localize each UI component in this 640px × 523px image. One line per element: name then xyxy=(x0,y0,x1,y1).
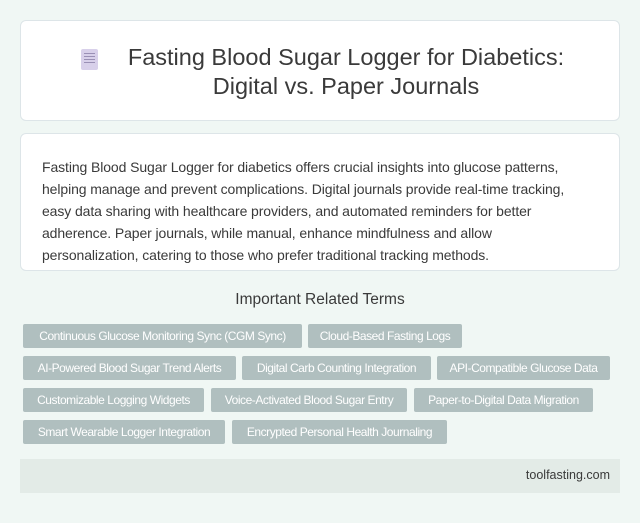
tags: Smart Wearable Logger Integration xyxy=(38,425,210,439)
description text: adherence. Paper journals, while manual, enhance mindfulness and allow xyxy=(42,225,492,241)
tags: AI-Powered Blood Sugar Trend Alerts xyxy=(38,361,221,375)
title xyxy=(128,44,564,99)
description card xyxy=(20,133,620,271)
tags: API-Compatible Glucose Data xyxy=(450,361,597,375)
section heading: Important Related Terms xyxy=(235,291,405,308)
footer xyxy=(20,459,620,493)
description text: personalization, catering to those who prefer traditional tracking methods. xyxy=(42,247,489,263)
tags: Paper-to-Digital Data Migration xyxy=(428,393,579,407)
title: Digital vs. Paper Journals xyxy=(213,73,479,99)
tags: Customizable Logging Widgets xyxy=(37,393,190,407)
tags: Digital Carb Counting Integration xyxy=(257,361,416,375)
tags: Encrypted Personal Health Journaling xyxy=(247,425,432,439)
description text: helping manage and prevent complications. Digital journals provide real-time tracking, xyxy=(42,181,564,197)
tags: Cloud-Based Fasting Logs xyxy=(320,329,450,343)
header card xyxy=(20,20,620,121)
tags: Voice-Activated Blood Sugar Entry xyxy=(225,393,393,407)
description text: Fasting Blood Sugar Logger for diabetics offers crucial insights into glucose patterns, xyxy=(42,159,558,175)
description text: easy data sharing with healthcare providers, and automated reminders for better xyxy=(42,203,531,219)
footer source text: toolfasting.com xyxy=(526,468,610,482)
title: Fasting Blood Sugar Logger for Diabetics: xyxy=(128,44,564,70)
icon: paper log xyxy=(81,49,98,70)
tags: Continuous Glucose Monitoring Sync (CGM Sync) xyxy=(39,329,286,343)
description text xyxy=(42,159,564,263)
